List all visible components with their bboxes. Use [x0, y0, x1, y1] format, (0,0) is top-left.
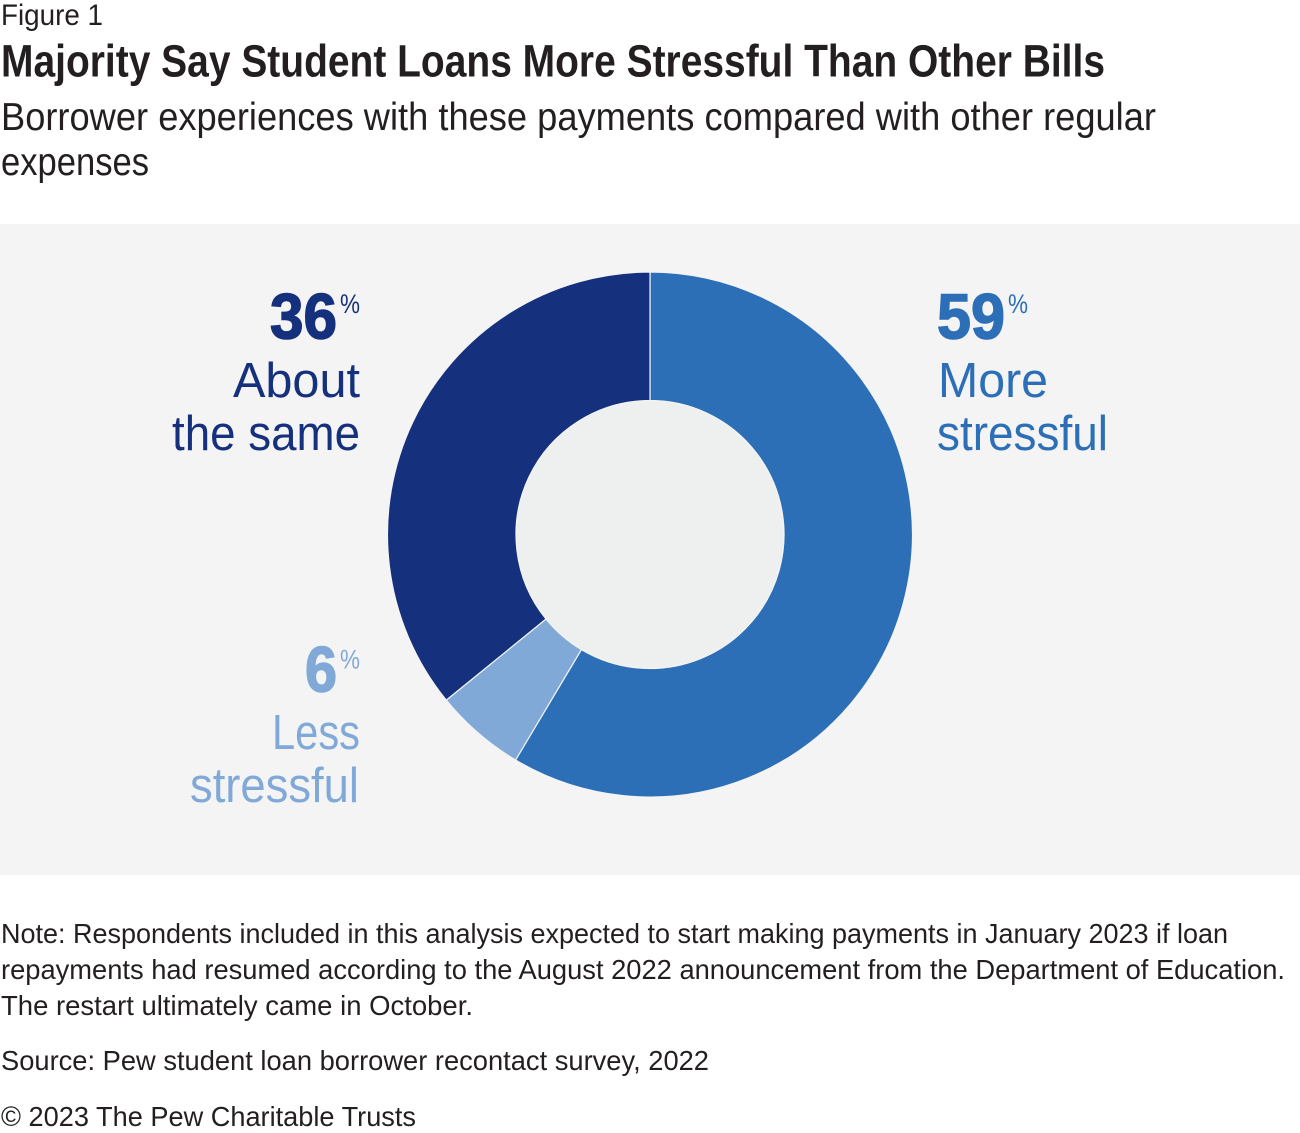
donut chart: [387, 272, 912, 797]
label: 36% about the same: [172, 280, 360, 461]
label: 36% about the same: %: [340, 289, 360, 319]
note: The restart ultimately came in October.: [1, 990, 473, 1021]
subtitle: [1, 96, 1156, 184]
source: Source: Pew student loan borrower recontact survey, 2022: [1, 1045, 709, 1076]
subtitle: Borrower experiences with these payments compared with other regular: [1, 96, 1156, 139]
note: Note: Respondents included in this analysis expected to start making payments in January 2023 if loan: [1, 918, 1228, 949]
label: 6% less stressful: stressful: [190, 759, 359, 813]
label: 6% less stressful: 6: [305, 634, 337, 706]
label: 59% more stressful: [937, 280, 1108, 461]
label: 6% less stressful: Less: [272, 706, 360, 760]
label: 59% more stressful: 59: [937, 280, 1005, 352]
label: 6% less stressful: [190, 634, 360, 813]
slice: more stressful 59%: [516, 272, 912, 797]
subtitle: expenses: [1, 141, 149, 184]
slice: about the same 36%: [387, 272, 650, 700]
slice: less stressful 6%: [446, 619, 581, 760]
panel: chart background: [0, 224, 1300, 875]
donut centre: [516, 400, 784, 668]
title: Majority Say Student Loans More Stressful Than Other Bills: [1, 36, 1105, 86]
label: 36% about the same: About: [233, 354, 360, 408]
label: 36% about the same: 36: [270, 280, 337, 352]
label: 59% more stressful: %: [1008, 289, 1028, 319]
label: 36% about the same: the same: [172, 407, 360, 461]
label: 59% more stressful: More: [938, 354, 1048, 408]
note: repayments had resumed according to the August 2022 announcement from the Department of Education.: [1, 954, 1285, 985]
label: 6% less stressful: %: [340, 644, 360, 674]
copyright: © 2023 The Pew Charitable Trusts: [1, 1101, 416, 1132]
label: 59% more stressful: stressful: [937, 407, 1108, 461]
note: [1, 918, 1285, 1021]
